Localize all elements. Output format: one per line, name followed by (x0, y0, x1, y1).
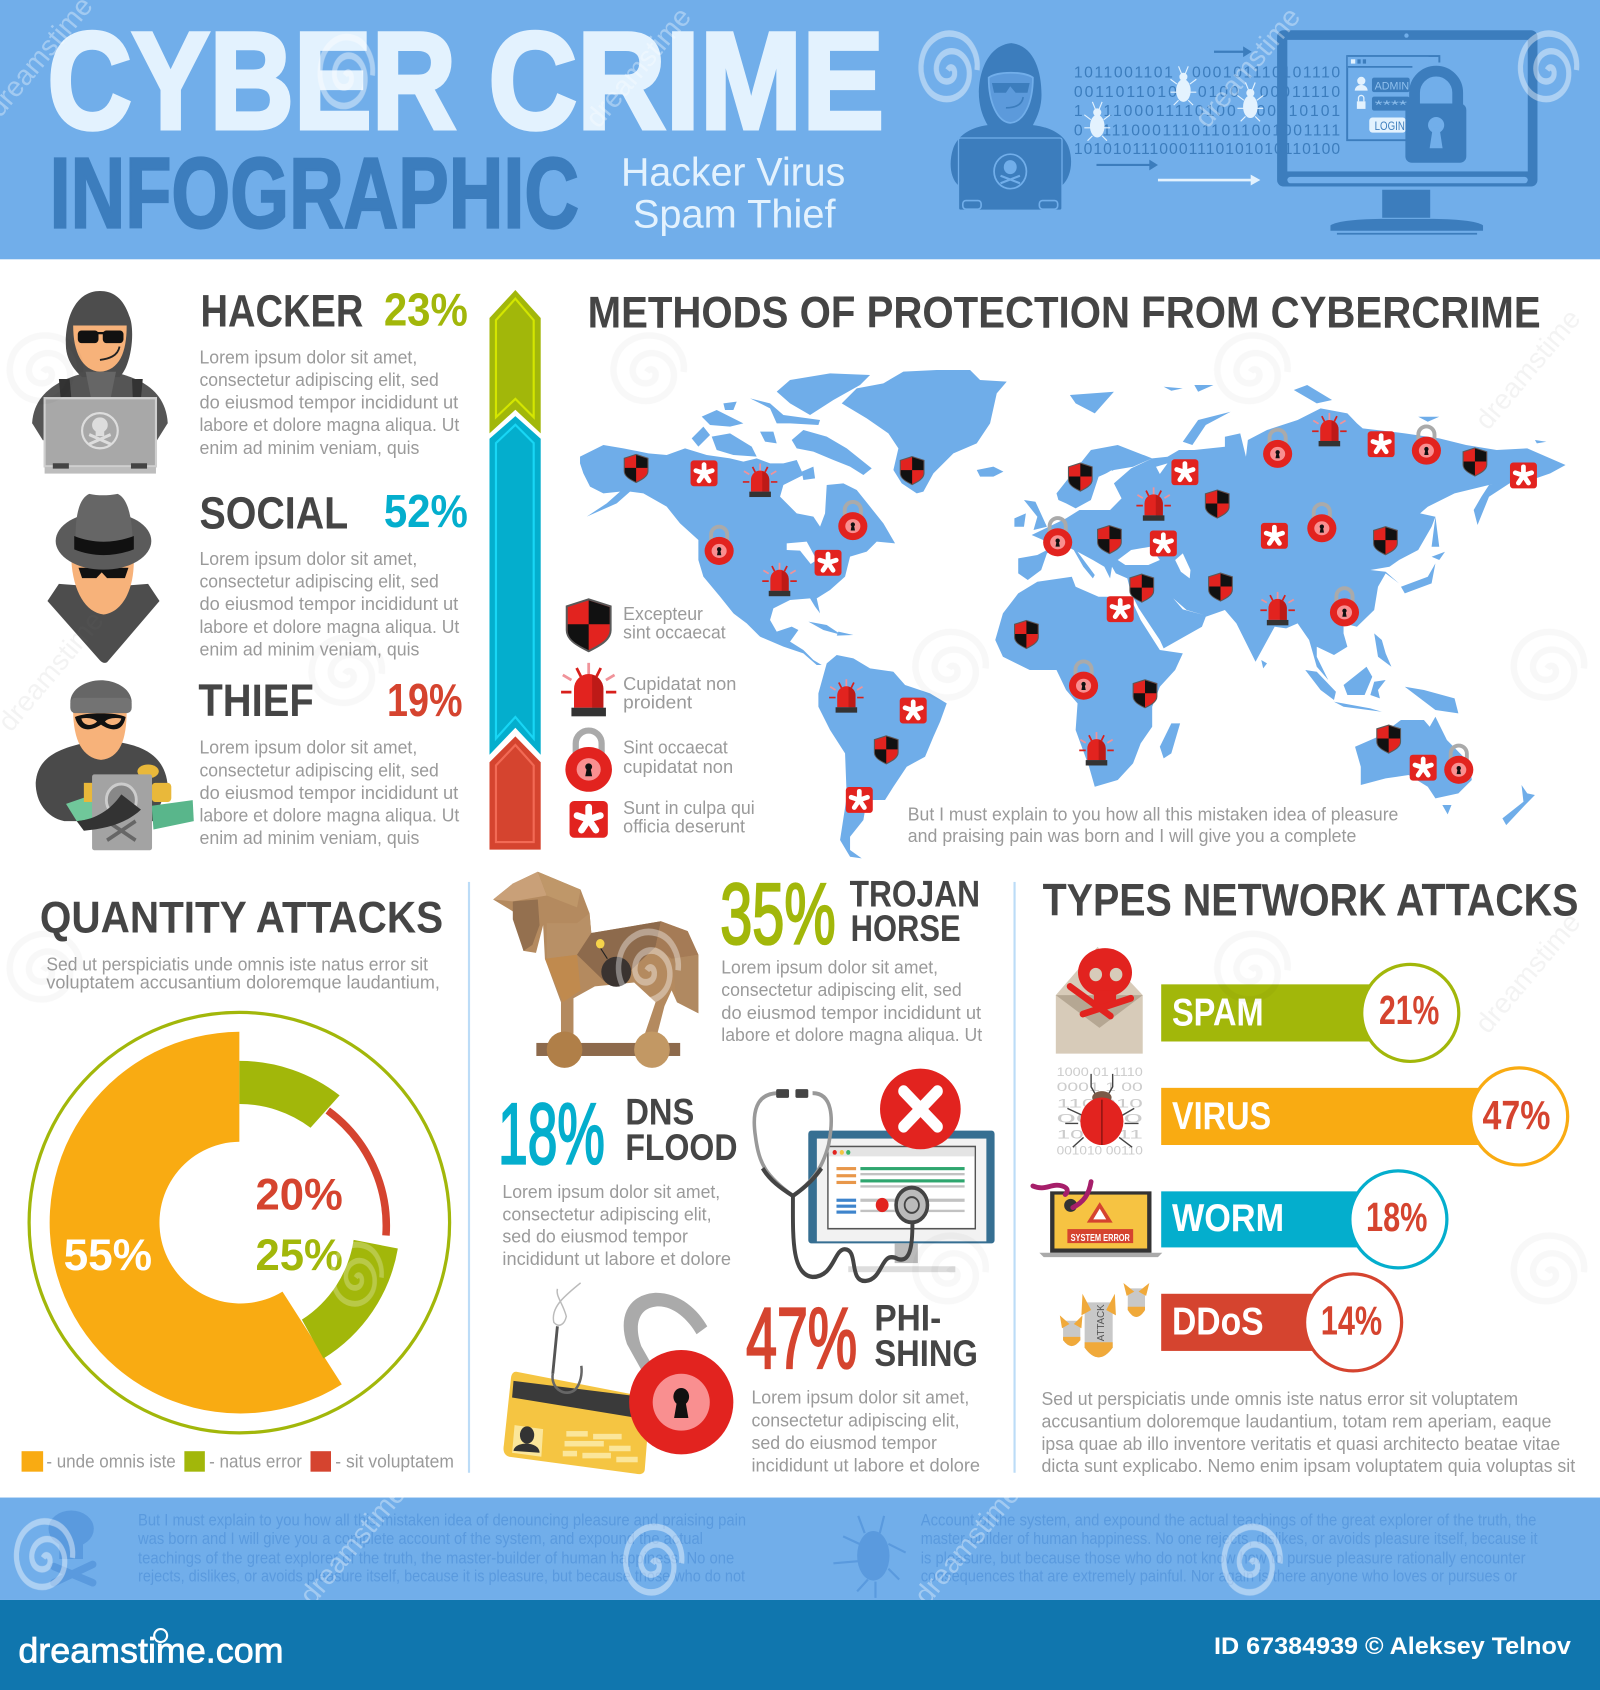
text block: do eiusmod tempor incididunt ut (199, 593, 458, 614)
watermark text: dreamstime (908, 1478, 1026, 1610)
text block: enim ad minim veniam, quis (199, 639, 419, 660)
text block (751, 1387, 980, 1476)
text block: sed do eiusmod tempor (502, 1226, 688, 1247)
map caption (908, 803, 1398, 846)
chart legend: - natus error (209, 1450, 302, 1471)
text block: labore et dolore magna aliqua. Ut (199, 616, 459, 637)
legend item: siren: proident (623, 691, 692, 712)
binary code stream: 1 1100011110100 00010101 (1074, 103, 1340, 120)
percentage 18%: 18% (498, 1086, 605, 1182)
text block (199, 548, 459, 660)
legend item: shield: sint occaecat (623, 621, 726, 642)
value 21%: 21% (1379, 987, 1439, 1033)
percentage 52%: 52% (384, 485, 468, 537)
Scandinavia (1056, 445, 1152, 508)
heading DNS FLOOD (625, 1092, 737, 1168)
legend item: siren (561, 663, 736, 716)
text block left (137, 1512, 746, 1586)
text block: consectetur adipiscing elit, sed (199, 759, 439, 780)
tagline: Hacker Virus (621, 150, 845, 194)
value 14% (1305, 1274, 1402, 1371)
chart: stacked arrow bar (489, 290, 541, 850)
text block left: was born and I will give you a complete account of the system, and expound the actual (137, 1530, 703, 1548)
chart: donut (29, 1012, 450, 1433)
row: worm (1033, 1171, 1447, 1268)
label SPAM: SPAM (1172, 991, 1264, 1034)
arrows (1096, 46, 1260, 185)
value 47%: 47% (1482, 1092, 1550, 1138)
text block: consectetur adipiscing elit, (751, 1409, 960, 1430)
text block left: teachings of the great explorer of the truth, the master-builder of human happiness. No one (138, 1549, 734, 1567)
Iceland (977, 467, 1003, 477)
chart legend: - unde omnis iste (46, 1450, 176, 1471)
text block: do eiusmod tempor incididunt ut (199, 782, 458, 803)
logo spiral (154, 1629, 167, 1642)
icon: hacker with laptop (32, 291, 168, 474)
icon: attack missiles: ATTACK (1096, 1304, 1107, 1341)
Australia and Tasmania (1355, 717, 1472, 814)
chart legend (22, 1450, 454, 1472)
footer bar (0, 1600, 1600, 1690)
watermark text: dreamstime (1469, 303, 1587, 435)
heading TROJAN HORSE: HORSE (851, 908, 961, 949)
text block: dicta sunt explicabo. Nemo enim ipsam voluptatem quia voluptas sit (1042, 1455, 1575, 1476)
text block (199, 737, 459, 848)
text block: do eiusmod tempor incididunt ut (721, 1002, 981, 1023)
heading DNS FLOOD: FLOOD (625, 1127, 737, 1168)
icon: bug over binary: 00 00 (1057, 1111, 1144, 1125)
bar (1161, 1191, 1361, 1247)
icon: bug over binary (1057, 1065, 1144, 1158)
text block: Sed ut perspiciatis unde omnis iste natus error sit voluptatem (1042, 1388, 1518, 1409)
title: CYBER CRIME (47, 4, 884, 158)
heading: HACKER: HACKER (201, 286, 363, 337)
New Zealand (1502, 785, 1535, 825)
Greenland (842, 370, 1007, 493)
panel: thief profile (36, 674, 463, 850)
Arctic islands (1070, 385, 1546, 445)
label 20%: 20% (256, 1171, 343, 1220)
icon: diagnosing infected monitor (754, 1069, 995, 1281)
icon: bug over binary: 0001 1 00 (1057, 1080, 1144, 1094)
image credit: ID 67384939 © Aleksey Telnov (1214, 1634, 1572, 1660)
label VIRUS: VIRUS (1172, 1095, 1271, 1138)
text block right: consequences that are extremely painful. Nor again is there anyone who loves or pursues or (921, 1568, 1518, 1586)
bar (1161, 1294, 1318, 1351)
legend item: asterisk: officia deserunt (623, 815, 745, 836)
Caribbean (808, 622, 853, 636)
icon: bug over binary: 1000 01 1110 (1057, 1065, 1143, 1079)
panel: phishing (504, 1283, 980, 1476)
text block: sed do eiusmod tempor (751, 1432, 937, 1453)
icon: monitor with login and padlock: **** (1375, 98, 1408, 112)
tagline: Spam Thief (633, 192, 836, 236)
panel: bottom info band (0, 1498, 1600, 1600)
text block: labore et dolore magna aliqua. Ut (199, 805, 459, 826)
Sakhalin and Japan (1401, 517, 1445, 593)
icon: monitor with login and padlock: ADMIN (1375, 80, 1409, 92)
intro text: Sed ut perspiciatis unde omnis iste natus error sit (46, 953, 428, 974)
text block right (921, 1512, 1538, 1586)
panel: types network attacks (1033, 874, 1578, 1476)
heading DNS FLOOD: DNS (625, 1092, 694, 1133)
icon: skull (49, 1510, 94, 1583)
heading: SOCIAL: SOCIAL (199, 487, 348, 538)
chart legend: - sit voluptatem (335, 1450, 454, 1471)
icon: bug over binary: 110 010 (1057, 1096, 1144, 1110)
chart: world map (580, 370, 1566, 858)
label WORM: WORM (1172, 1197, 1284, 1240)
Kamchatka (1474, 482, 1512, 525)
bar (1161, 984, 1371, 1041)
markers: shields (624, 448, 1487, 764)
text block left: But I must explain to you how all this mistaken idea of denouncing pleasure and praising pain (138, 1512, 746, 1530)
icon: blue hacker with laptop (951, 43, 1071, 210)
markers: sirens (743, 413, 1347, 765)
heading TROJAN HORSE (850, 874, 980, 949)
South America (818, 655, 947, 858)
markers: asterisk alerts (691, 431, 1537, 813)
text block: enim ad minim veniam, quis (199, 827, 419, 848)
text block: Lorem ipsum dolor sit amet, (199, 346, 417, 367)
text block: ipsa quae ab illo inventore veritatis et quasi architecto beatae vitae (1042, 1433, 1560, 1454)
percentage 19%: 19% (387, 674, 463, 726)
subtitle: INFOGRAPHIC: INFOGRAPHIC (50, 137, 579, 249)
legend item: padlock: cupidatat non (623, 756, 733, 777)
legend item: padlock: Sint occaecat (623, 737, 728, 758)
panel: quantity attacks (22, 894, 454, 1472)
icons: white bugs (1084, 66, 1263, 141)
text block: Lorem ipsum dolor sit amet, (199, 737, 417, 758)
Southeast Asia islands (1305, 633, 1458, 713)
text block: consectetur adipiscing elit, (502, 1203, 712, 1224)
watermark text: dreamstime (1188, 1, 1306, 133)
binary code stream (1074, 65, 1340, 158)
heading: QUANTITY ATTACKS (40, 894, 443, 943)
legend: map markers (561, 599, 755, 838)
label DDoS: DDoS (1172, 1301, 1264, 1344)
panel: trojan horse (493, 866, 982, 1068)
heading: THIEF: THIEF (198, 675, 314, 726)
text block: Lorem ipsum dolor sit amet, (721, 957, 938, 978)
percentage 35%: 35% (720, 866, 836, 962)
text block right: master-builder of human happiness. No one rejects, dislikes, or avoids pleasure itself, because it (921, 1530, 1538, 1548)
label 25%: 25% (256, 1231, 343, 1280)
text block right: is pleasure, but because those who do not know how to pursue pleasure rationally encounter (921, 1549, 1526, 1567)
logo text: dreamstime.com (18, 1631, 284, 1671)
icon: thief with safe and money (36, 680, 194, 850)
binary code stream: 0011011010 0100 00011110 (1074, 84, 1340, 101)
value 18% (1350, 1171, 1447, 1268)
bar (1161, 1088, 1479, 1145)
title: CYBER CRIME: CYBER (47, 4, 456, 158)
panel: DNS flood (498, 1069, 995, 1281)
icon: laptop system error (1033, 1182, 1162, 1257)
watermark text: dreamstime (579, 1, 697, 133)
icon: monitor with login and padlock (1277, 30, 1537, 235)
text block (199, 346, 459, 458)
text block: accusantium doloremque laudantium, totam rem aperiam, eaque (1042, 1410, 1551, 1431)
row: spam (1056, 947, 1459, 1061)
Africa (995, 577, 1183, 787)
watermark text: dreamstime (1469, 907, 1587, 1039)
binary code stream: 0 111000111011011001001111 (1074, 122, 1340, 139)
text block: Lorem ipsum dolor sit amet, (199, 548, 417, 569)
label 55%: 55% (64, 1231, 152, 1280)
tagline (621, 150, 845, 236)
legend item: shield (567, 599, 726, 651)
map caption: and praising pain was born and I will give you a complete (908, 825, 1356, 846)
value 47% (1471, 1068, 1568, 1165)
text block: incididunt ut labore et dolore (751, 1455, 980, 1476)
legend item: shield: Excepteur (623, 603, 703, 624)
value 21% (1362, 964, 1459, 1061)
text block: incididunt ut labore et dolore (502, 1248, 731, 1269)
legend item: padlock (565, 731, 733, 792)
binary code stream: 1010101110001110101010110100 (1074, 141, 1340, 158)
text block: consectetur adipiscing elit, sed (199, 571, 439, 592)
text block: consectetur adipiscing elit, sed (199, 369, 439, 390)
icon: wooden horse (493, 872, 698, 1068)
markers: padlocks (705, 426, 1473, 784)
text block: labore et dolore magna aliqua. Ut (199, 414, 459, 435)
binary code stream: 1011001101 000101110101110 (1074, 65, 1340, 82)
panel: social profile (47, 485, 468, 663)
legend item: asterisk (570, 797, 755, 838)
icon: bug over binary: 100 011 (1057, 1128, 1144, 1142)
percentage 23%: 23% (384, 284, 468, 336)
title: CYBER CRIME: CRIME (488, 4, 884, 158)
text block: do eiusmod tempor incididunt ut (199, 392, 458, 413)
heading PHISHING (874, 1297, 978, 1374)
text block (502, 1181, 731, 1269)
Madagascar (1160, 723, 1180, 758)
text block (721, 957, 982, 1045)
text block (1042, 1388, 1575, 1476)
intro text (46, 953, 440, 993)
icon: bug over binary: 001010 00110 (1057, 1144, 1143, 1158)
icon: spy with hat (47, 494, 160, 663)
text block: enim ad minim veniam, quis (199, 437, 419, 458)
heading PHISHING: PHI- (874, 1297, 941, 1338)
text block: consectetur adipiscing elit, sed (721, 979, 962, 1000)
icon: laptop system error: SYSTEM ERROR (1071, 1233, 1130, 1244)
legend item: asterisk: Sunt in culpa qui (623, 797, 755, 818)
North America (580, 445, 895, 665)
value 14%: 14% (1321, 1298, 1382, 1344)
value 18%: 18% (1366, 1194, 1427, 1240)
row: virus (1057, 1065, 1568, 1165)
text block left: rejects, dislikes, or avoids pleasure itself, because it is pleasure, but because those who do not (138, 1568, 745, 1586)
panel: header banner (0, 0, 1600, 259)
icon: large padlock on screen (1405, 71, 1466, 163)
text block: labore et dolore magna aliqua. Ut (721, 1024, 982, 1045)
intro text: voluptatem accusantium doloremque laudantium, (46, 972, 440, 993)
icon: attack missiles (1060, 1283, 1149, 1357)
heading TROJAN HORSE: TROJAN (850, 874, 980, 915)
row: DDoS (1060, 1274, 1402, 1371)
legend item: siren: Cupidatat non (623, 673, 736, 694)
watermark text: dreamstime (294, 1478, 411, 1610)
panel: hacker profile (32, 284, 468, 474)
text block: Lorem ipsum dolor sit amet, (502, 1181, 720, 1202)
text block: Lorem ipsum dolor sit amet, (751, 1387, 969, 1408)
icon: bug (833, 1516, 906, 1598)
icon: hooked card with open padlock (504, 1283, 733, 1474)
heading PHISHING: SHING (874, 1333, 978, 1374)
Sri Lanka, UK, Ireland (1014, 500, 1267, 668)
map caption: But I must explain to you how all this mistaken idea of pleasure (908, 803, 1398, 824)
Eurasia (1018, 408, 1566, 680)
icon: monitor with login and padlock: LOGIN (1375, 119, 1405, 133)
icon: skull envelope (1056, 947, 1143, 1054)
text block right: Account of the system, and expound the actual teachings of the great explorer of the truth, the (921, 1512, 1536, 1530)
Arctic islands (692, 373, 872, 480)
percentage 47%: 47% (746, 1291, 857, 1387)
